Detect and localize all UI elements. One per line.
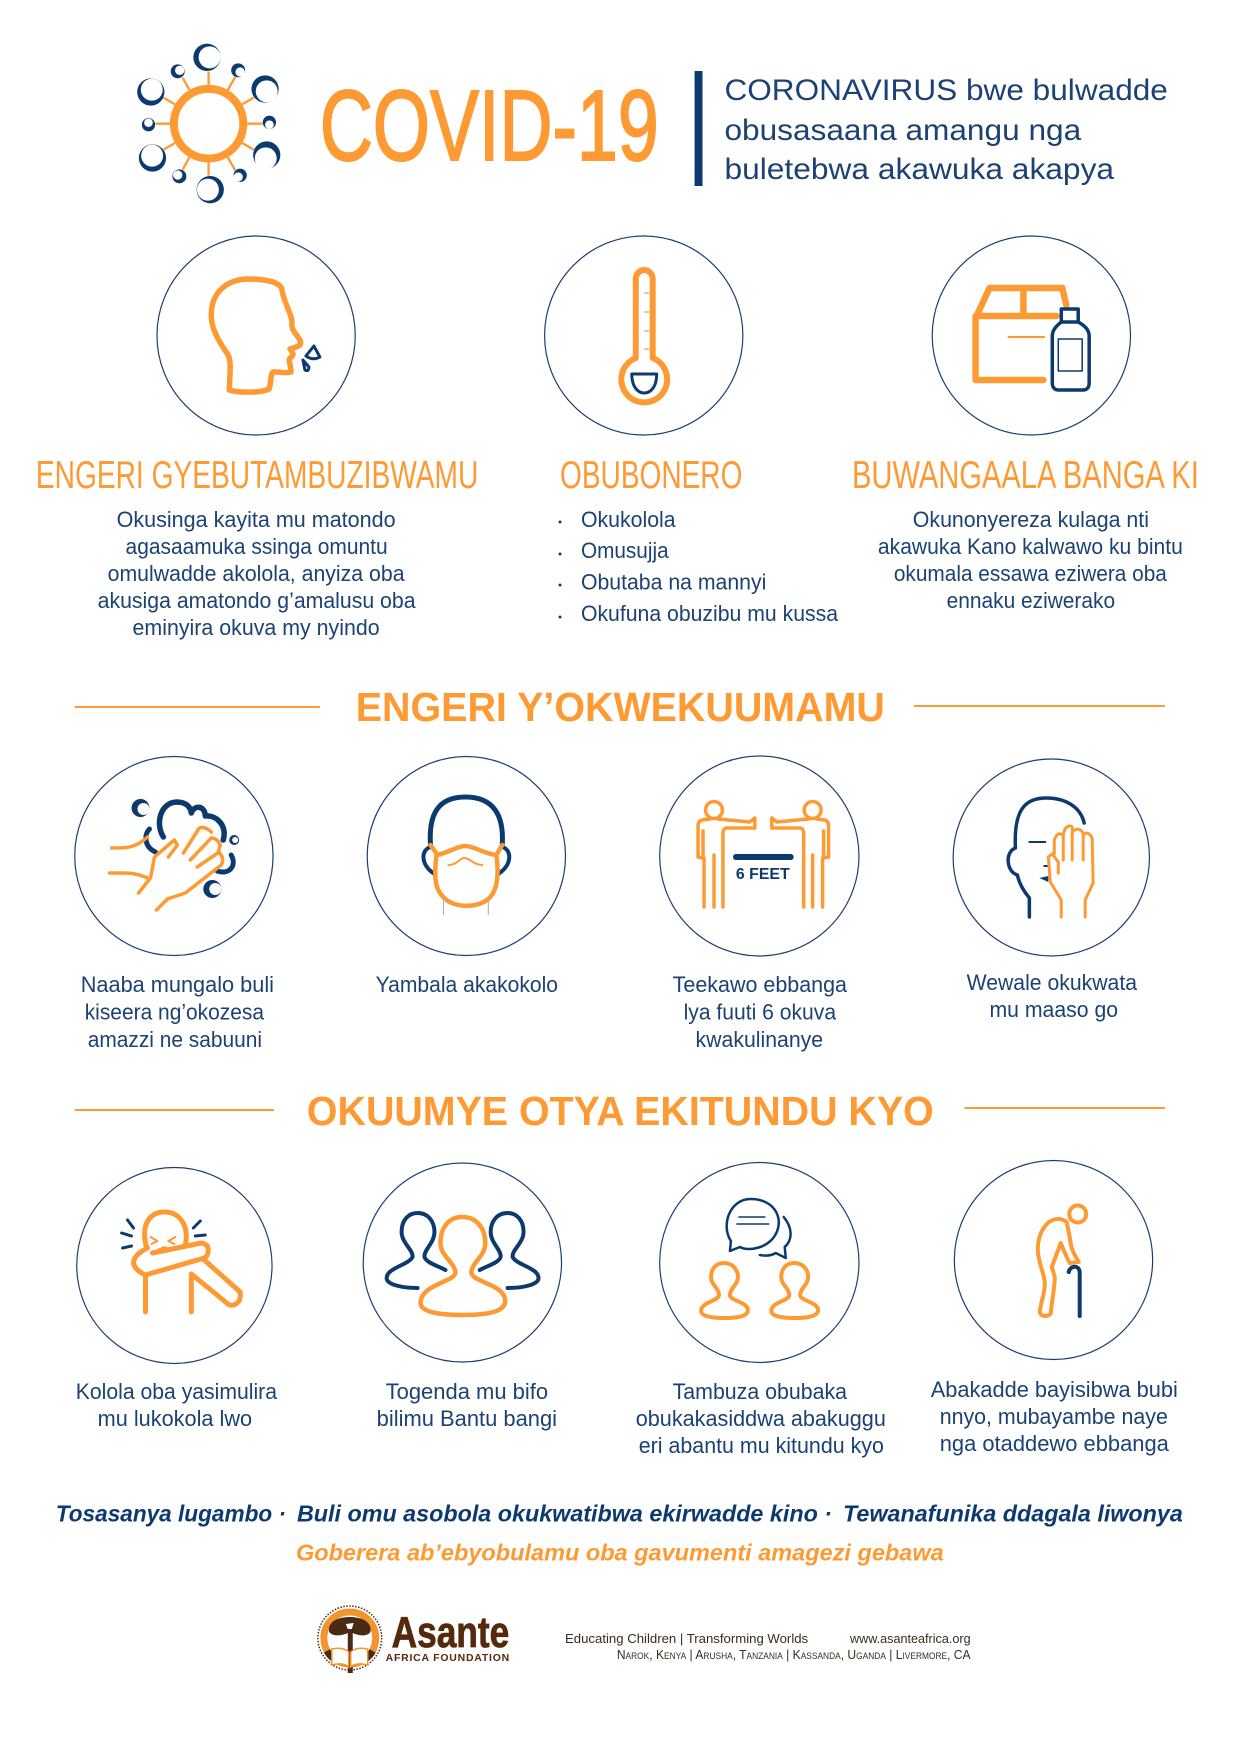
icon: hand touching face <box>953 759 1149 956</box>
label: keep distance: lya fuuti 6 okuva <box>684 999 837 1025</box>
list: symptoms: Okufuna obuzibu mu kussa <box>581 601 839 626</box>
icon: box and bottle <box>932 236 1131 435</box>
key messages: Goberera ab’ebyobulamu oba gavumenti amagezi gebawa <box>296 1539 944 1566</box>
label: keep distance: kwakulinanye <box>696 1027 823 1052</box>
logo wordmark <box>386 1608 509 1664</box>
label: share information: obukakasiddwa abakuggu <box>636 1406 886 1431</box>
label: avoid crowds: Togenda mu bifo <box>386 1379 548 1404</box>
key messages: Buli omu asobola okukwatibwa ekirwadde kino · <box>297 1500 832 1527</box>
label: protect elderly: Abakadde bayisibwa bubi <box>931 1377 1178 1402</box>
panel: cough into elbow <box>76 1168 278 1431</box>
icon: washing hands <box>75 756 273 956</box>
icon: six feet distance <box>660 756 859 956</box>
list: symptoms: Okukolola <box>581 507 676 532</box>
label: keep distance: Teekawo ebbanga <box>673 972 848 997</box>
text: how it spreads: eminyira okuva my nyindo <box>133 615 380 640</box>
icon: group of people <box>363 1163 562 1362</box>
header description: buletebwa akawuka akapya <box>724 153 1114 186</box>
footer <box>318 1606 971 1673</box>
text: how long it lasts <box>878 507 1183 613</box>
text: how long it lasts: okumala essawa eziwera oba <box>894 561 1168 586</box>
label: wash hands <box>81 972 274 1052</box>
section heading: prevention: ENGERI Y’OKWEKUUMAMU <box>356 684 885 730</box>
icon: thermometer <box>545 236 743 435</box>
text: how it spreads <box>98 507 416 640</box>
panel: keep distance <box>660 756 859 1052</box>
heading: symptoms: OBUBONERO <box>560 454 742 497</box>
footer tagline and locations: Educating Children | Transforming Worlds <box>565 1631 809 1646</box>
label: protect elderly: nga otaddewo ebbanga <box>940 1431 1170 1456</box>
text: how it spreads: omulwadde akolola, anyiza oba <box>108 561 405 586</box>
text: how long it lasts: akawuka Kano kalwawo ku bintu <box>878 534 1183 559</box>
label: wash hands: amazzi ne sabuuni <box>88 1027 262 1052</box>
logo wordmark: Asante <box>392 1608 509 1657</box>
text: how long it lasts: Okunonyereza kulaga nti <box>913 507 1149 532</box>
panel: wash hands <box>75 756 274 1052</box>
icon: coronavirus <box>137 44 280 203</box>
panel: share information <box>636 1162 886 1458</box>
text: how it spreads: agasaamuka ssinga omuntu <box>126 534 388 559</box>
icon: face mask <box>367 756 566 956</box>
panel: avoid crowds <box>363 1163 562 1431</box>
header description: obusasaana amangu nga <box>724 114 1082 147</box>
key messages: Tosasanya lugambo · <box>56 1500 286 1527</box>
label: do not touch face: mu maaso go <box>990 997 1118 1022</box>
title: COVID-19 <box>320 71 659 182</box>
heading: how it spreads: ENGERI GYEBUTAMBUZIBWAMU <box>36 454 478 497</box>
list: symptoms <box>559 507 839 626</box>
panel: symptoms <box>545 236 839 626</box>
logo wordmark: AFRICA FOUNDATION <box>386 1653 509 1664</box>
footer tagline and locations <box>565 1631 971 1662</box>
label: share information: Tambuza obubaka <box>673 1379 848 1404</box>
label: cough into elbow <box>76 1379 278 1431</box>
list: symptoms: Omusujja <box>581 538 669 563</box>
label: avoid crowds: bilimu Bantu bangi <box>377 1406 557 1431</box>
label: wash hands: Naaba mungalo buli <box>81 972 274 997</box>
panel: wear mask <box>367 756 566 997</box>
icon: person coughing <box>157 236 355 435</box>
key messages <box>56 1500 1183 1566</box>
label: avoid crowds <box>377 1379 557 1431</box>
label: do not touch face <box>967 970 1138 1022</box>
header <box>137 44 1168 203</box>
text: how it spreads: akusiga amatondo g’amalusu oba <box>98 588 416 613</box>
label: do not touch face: Wewale okukwata <box>967 970 1138 995</box>
label: wear mask: Yambala akakokolo <box>376 972 558 997</box>
label: protect elderly <box>931 1377 1178 1456</box>
header divider <box>695 71 703 186</box>
text: how it spreads: Okusinga kayita mu matondo <box>117 507 396 532</box>
panel: how it spreads <box>36 236 478 640</box>
label: share information: eri abantu mu kitundu kyo <box>639 1433 884 1458</box>
icon: six feet distance: 6 FEET <box>736 866 790 883</box>
key messages: Tewanafunika ddagala liwonya <box>843 1500 1183 1527</box>
panel: do not touch face <box>953 759 1149 1022</box>
panel: protect elderly <box>931 1160 1178 1456</box>
list: symptoms: Obutaba na mannyi <box>581 569 766 595</box>
label: cough into elbow: Kolola oba yasimulira <box>76 1379 278 1404</box>
logo: Asante Africa Foundation emblem <box>318 1606 382 1673</box>
label: cough into elbow: mu lukokola lwo <box>98 1406 252 1431</box>
footer tagline and locations: www.asanteafrica.org <box>849 1631 971 1646</box>
label: share information <box>636 1379 886 1458</box>
section heading: protect community: OKUUMYE OTYA EKITUNDU KYO <box>307 1088 934 1134</box>
label: protect elderly: nnyo, mubayambe naye <box>940 1404 1168 1429</box>
label: keep distance <box>673 972 848 1052</box>
footer tagline and locations: Narok, Kenya | Arusha, Tanzania | Kassanda, Uganda | Livermore, CA <box>617 1647 971 1662</box>
icon: coughing into elbow <box>77 1168 272 1364</box>
header description: CORONAVIRUS bwe bulwadde <box>724 74 1168 107</box>
header description <box>724 74 1168 186</box>
text: how long it lasts: ennaku eziwerako <box>947 588 1115 613</box>
icon: two people talking <box>660 1162 859 1362</box>
label: wash hands: kiseera ng’okozesa <box>85 999 265 1025</box>
panel: how long it lasts <box>852 236 1199 613</box>
icon: elderly person with cane <box>954 1160 1153 1360</box>
